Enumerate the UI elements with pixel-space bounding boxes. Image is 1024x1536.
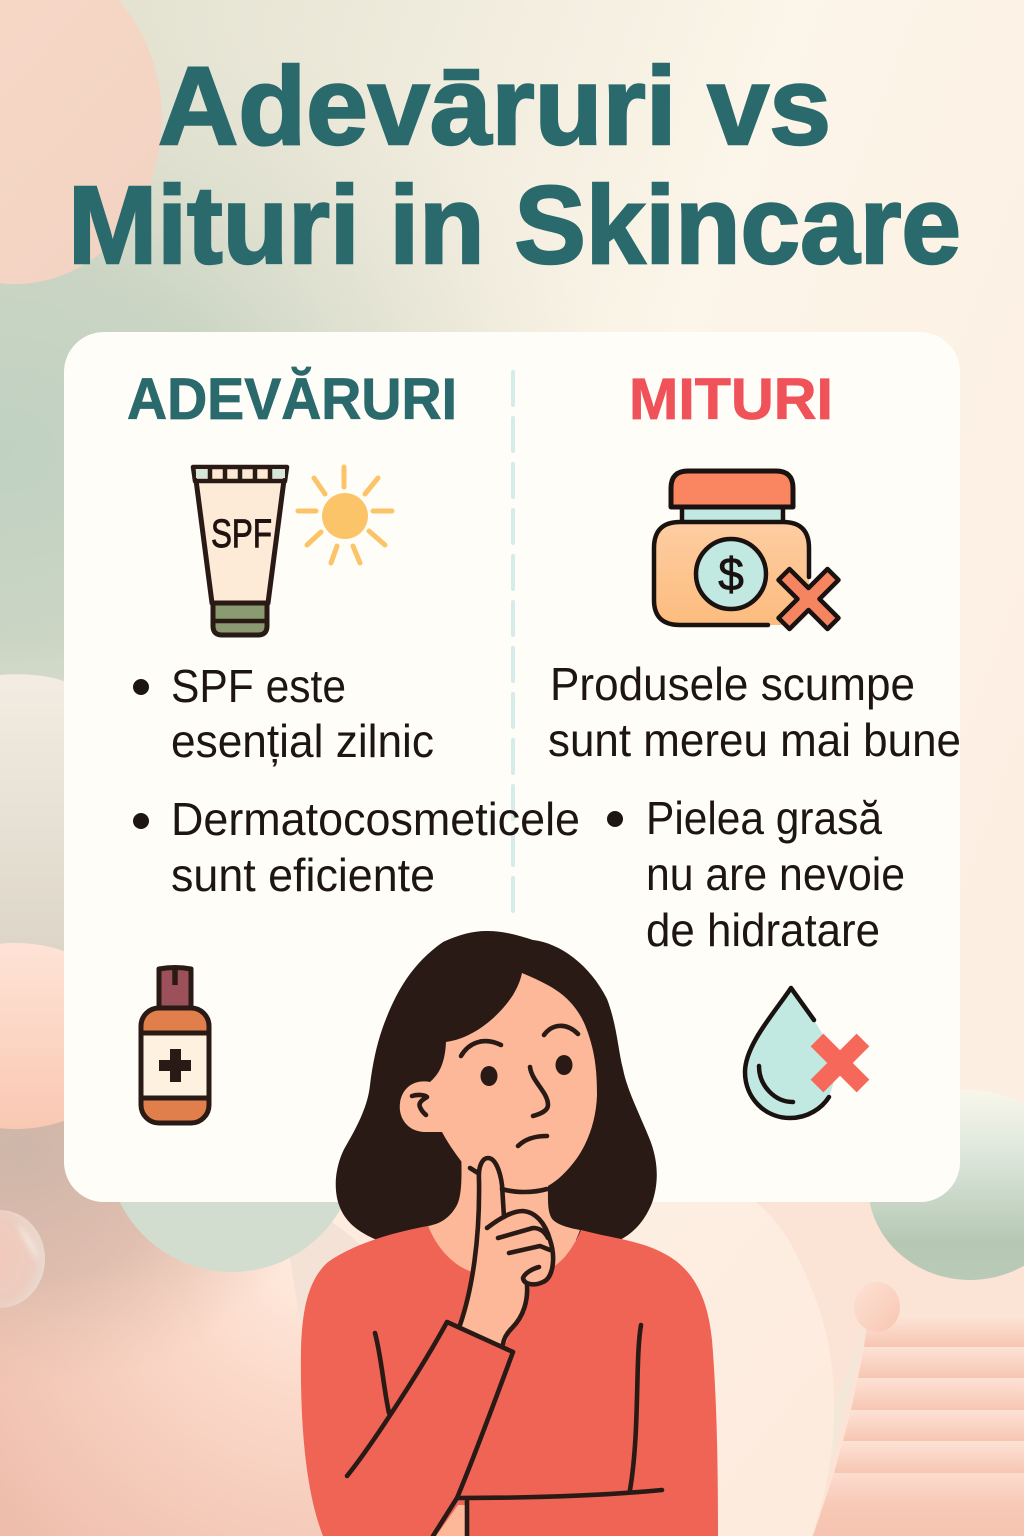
face lines bbox=[461, 1041, 501, 1056]
heading: adevaruri: ADEVĂRURI bbox=[127, 367, 457, 432]
bullet list: adevaruri: sunt eficiente bbox=[171, 849, 435, 901]
title: Mituri in Skincare bbox=[68, 164, 961, 287]
sweater bbox=[301, 1226, 718, 1536]
icon: water drop with cross bbox=[745, 988, 863, 1118]
bullet list: mituri: sunt mereu mai bune bbox=[548, 714, 961, 766]
bullet list: mituri bbox=[548, 658, 961, 956]
hair bbox=[336, 931, 657, 1240]
icon: jar with dollar and cross bbox=[654, 471, 838, 629]
bullet list: adevaruri: Dermatocosmeticele bbox=[171, 793, 580, 845]
panel: comparison card bbox=[64, 332, 960, 1202]
bullet list: mituri: Pielea grasă bbox=[646, 792, 882, 844]
heading: mituri: MITURI bbox=[629, 367, 833, 432]
hand and wrist bbox=[460, 1158, 553, 1350]
figure: thinking woman bbox=[301, 931, 718, 1536]
bullet list: mituri: Produsele scumpe bbox=[550, 658, 915, 710]
face bbox=[400, 973, 597, 1193]
sweater sleeve bbox=[340, 1322, 513, 1536]
icon: spf tube with sun: SPF bbox=[211, 512, 272, 556]
icon: spf tube with sun bbox=[193, 467, 392, 635]
hand lines bbox=[460, 1158, 504, 1325]
bullet list: adevaruri: esențial zilnic bbox=[171, 715, 434, 767]
icon: pharmacy bottle bbox=[141, 968, 209, 1123]
bullet list: adevaruri: SPF este bbox=[171, 660, 346, 712]
bullet list: adevaruri bbox=[133, 660, 580, 901]
sleeve lines bbox=[347, 1322, 513, 1536]
neck and chest bbox=[428, 1150, 580, 1280]
title: Adevāruri vs bbox=[158, 45, 831, 168]
title bbox=[68, 45, 961, 287]
bullet list: mituri: nu are nevoie bbox=[646, 848, 905, 900]
icon: jar with dollar and cross: $ bbox=[718, 548, 744, 600]
bullet list: mituri: de hidratare bbox=[646, 904, 880, 956]
